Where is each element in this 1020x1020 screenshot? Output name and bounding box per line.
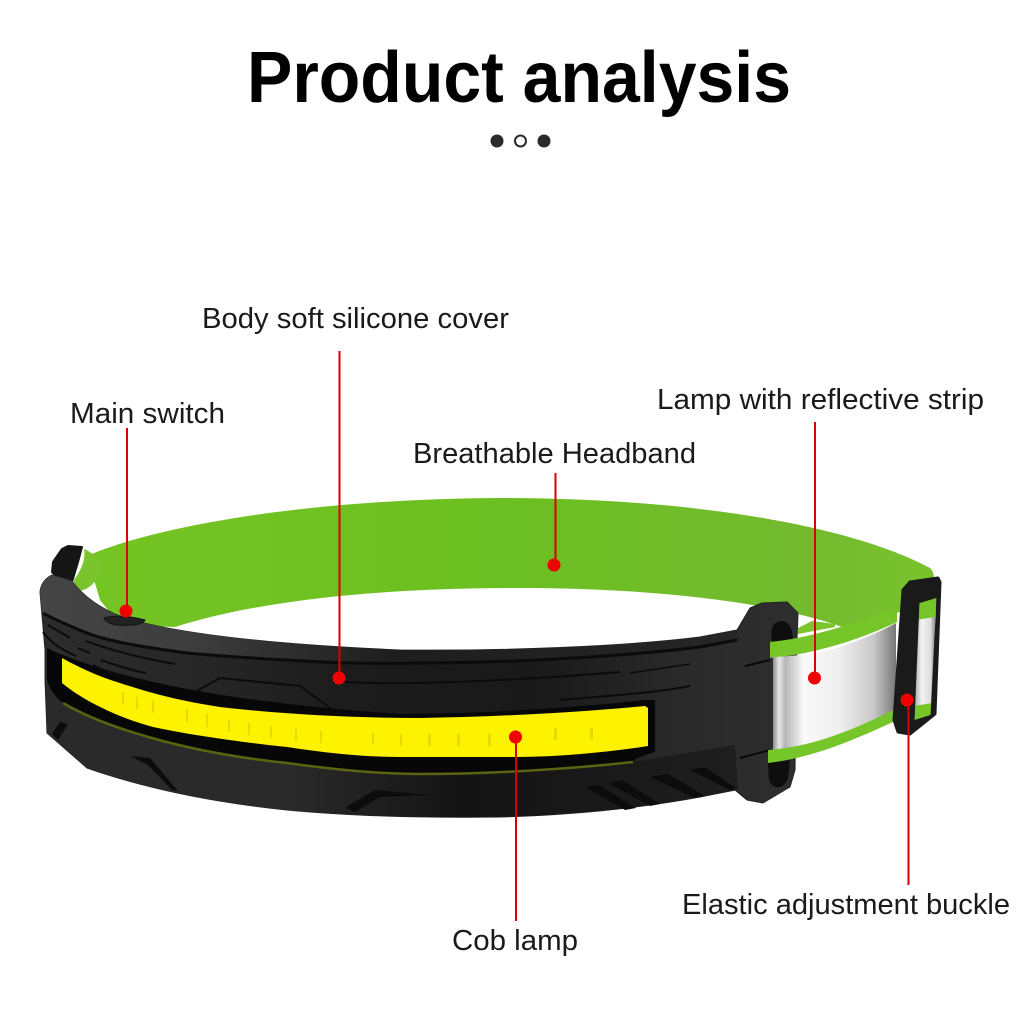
- body grooves: [43, 613, 770, 758]
- lamp bead marks: [122, 692, 593, 746]
- left strap loop: [74, 549, 100, 592]
- label: elastic adjustment buckle: [682, 694, 1010, 921]
- reflective strap lower green: [768, 709, 895, 763]
- reflective strip: [773, 623, 896, 750]
- reflective strap upper green: [770, 608, 897, 658]
- headlamp product illustration: [40, 498, 940, 817]
- cob lamp: [62, 658, 648, 757]
- title: Product analysis: [247, 38, 791, 118]
- label: main switch: Main switch: [70, 398, 225, 430]
- label: cob lamp: [452, 730, 578, 957]
- black body silhouette: [40, 575, 798, 817]
- small green strap piece behind lug: [798, 621, 835, 634]
- label: cob lamp: Cob lamp: [452, 925, 578, 957]
- title dots: [490, 134, 550, 148]
- label: breathable headband: [413, 438, 696, 572]
- switch button: [104, 616, 145, 625]
- label: body soft silicone cover: [202, 303, 509, 684]
- lug openings: [768, 621, 793, 787]
- label: body soft silicone cover: Body soft silicone cover: [202, 303, 509, 335]
- label: breathable headband: Breathable Headband: [413, 438, 696, 470]
- breathable headband back strap: [87, 498, 934, 628]
- lower body treads: [52, 722, 736, 812]
- label: elastic adjustment buckle: Elastic adjustment buckle: [682, 889, 1010, 921]
- white sliver behind left strap: [82, 590, 104, 612]
- label: lamp with reflective strip: Lamp with reflective strip: [657, 384, 984, 416]
- left clip: [52, 546, 82, 582]
- olive line on lower body: [63, 703, 633, 774]
- buckle strap inside: [913, 597, 937, 722]
- label: main switch: [70, 398, 225, 618]
- label: lamp with reflective strip: [657, 384, 984, 684]
- black recess around lamp: [47, 648, 655, 774]
- adjustment buckle: [894, 578, 940, 734]
- lower black body: [45, 680, 738, 817]
- rim highlight: [40, 575, 740, 663]
